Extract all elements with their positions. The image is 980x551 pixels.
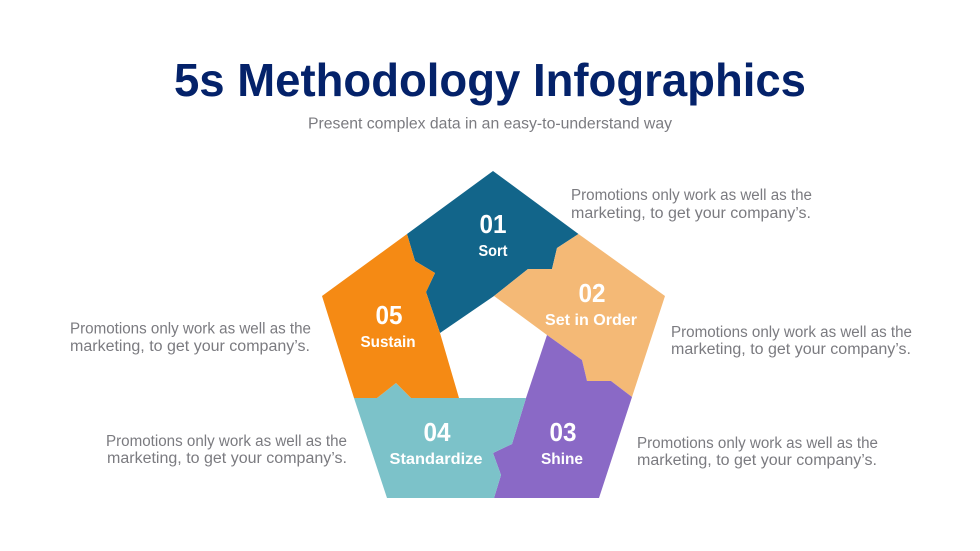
text block 05: marketing, to get your company’s. [70, 338, 310, 355]
segment 01: Sort: Sort [478, 243, 508, 260]
segment 03: Shine: 03 [550, 417, 576, 447]
segment 02: Set in Order [494, 234, 665, 397]
text block 01: marketing, to get your company’s. [571, 205, 811, 222]
segment 05: Sustain: 05 [376, 300, 402, 330]
segment 04: Standardize: 04 [424, 417, 451, 447]
text block 04: marketing, to get your company’s. [107, 450, 347, 467]
text block 05: Promotions only work as well as the [70, 320, 311, 338]
segment 04: Standardize: Standardize [390, 451, 483, 468]
segment 03: Shine [493, 335, 632, 498]
segment 04: Standardize [354, 383, 526, 498]
segment 02: Set in Order: Set in Order [545, 312, 637, 329]
segment 05: Sustain: Sustain [360, 334, 416, 351]
text block 01: Promotions only work as well as the [571, 187, 812, 204]
text block 02 [671, 324, 912, 358]
text block 03 [637, 435, 878, 469]
subtitle: Present complex data in an easy-to-understand way [308, 116, 672, 132]
text block 05 [70, 320, 311, 355]
title: 5s Methodology Infographics [174, 54, 806, 106]
segment 02: Set in Order: 02 [578, 278, 606, 308]
text block 03: Promotions only work as well as the [637, 435, 878, 452]
text block 02: Promotions only work as well as the [671, 324, 912, 341]
segment 03: Shine: Shine [541, 451, 583, 468]
text block 02: marketing, to get your company’s. [671, 341, 911, 358]
text block 03: marketing, to get your company’s. [637, 452, 877, 469]
segment 05: Sustain [322, 234, 459, 398]
text block 04: Promotions only work as well as the [106, 433, 347, 450]
text block 04 [106, 433, 347, 467]
text block 01 [571, 187, 812, 222]
segment 01: Sort [407, 171, 578, 333]
segment 01: Sort: 01 [480, 209, 506, 239]
